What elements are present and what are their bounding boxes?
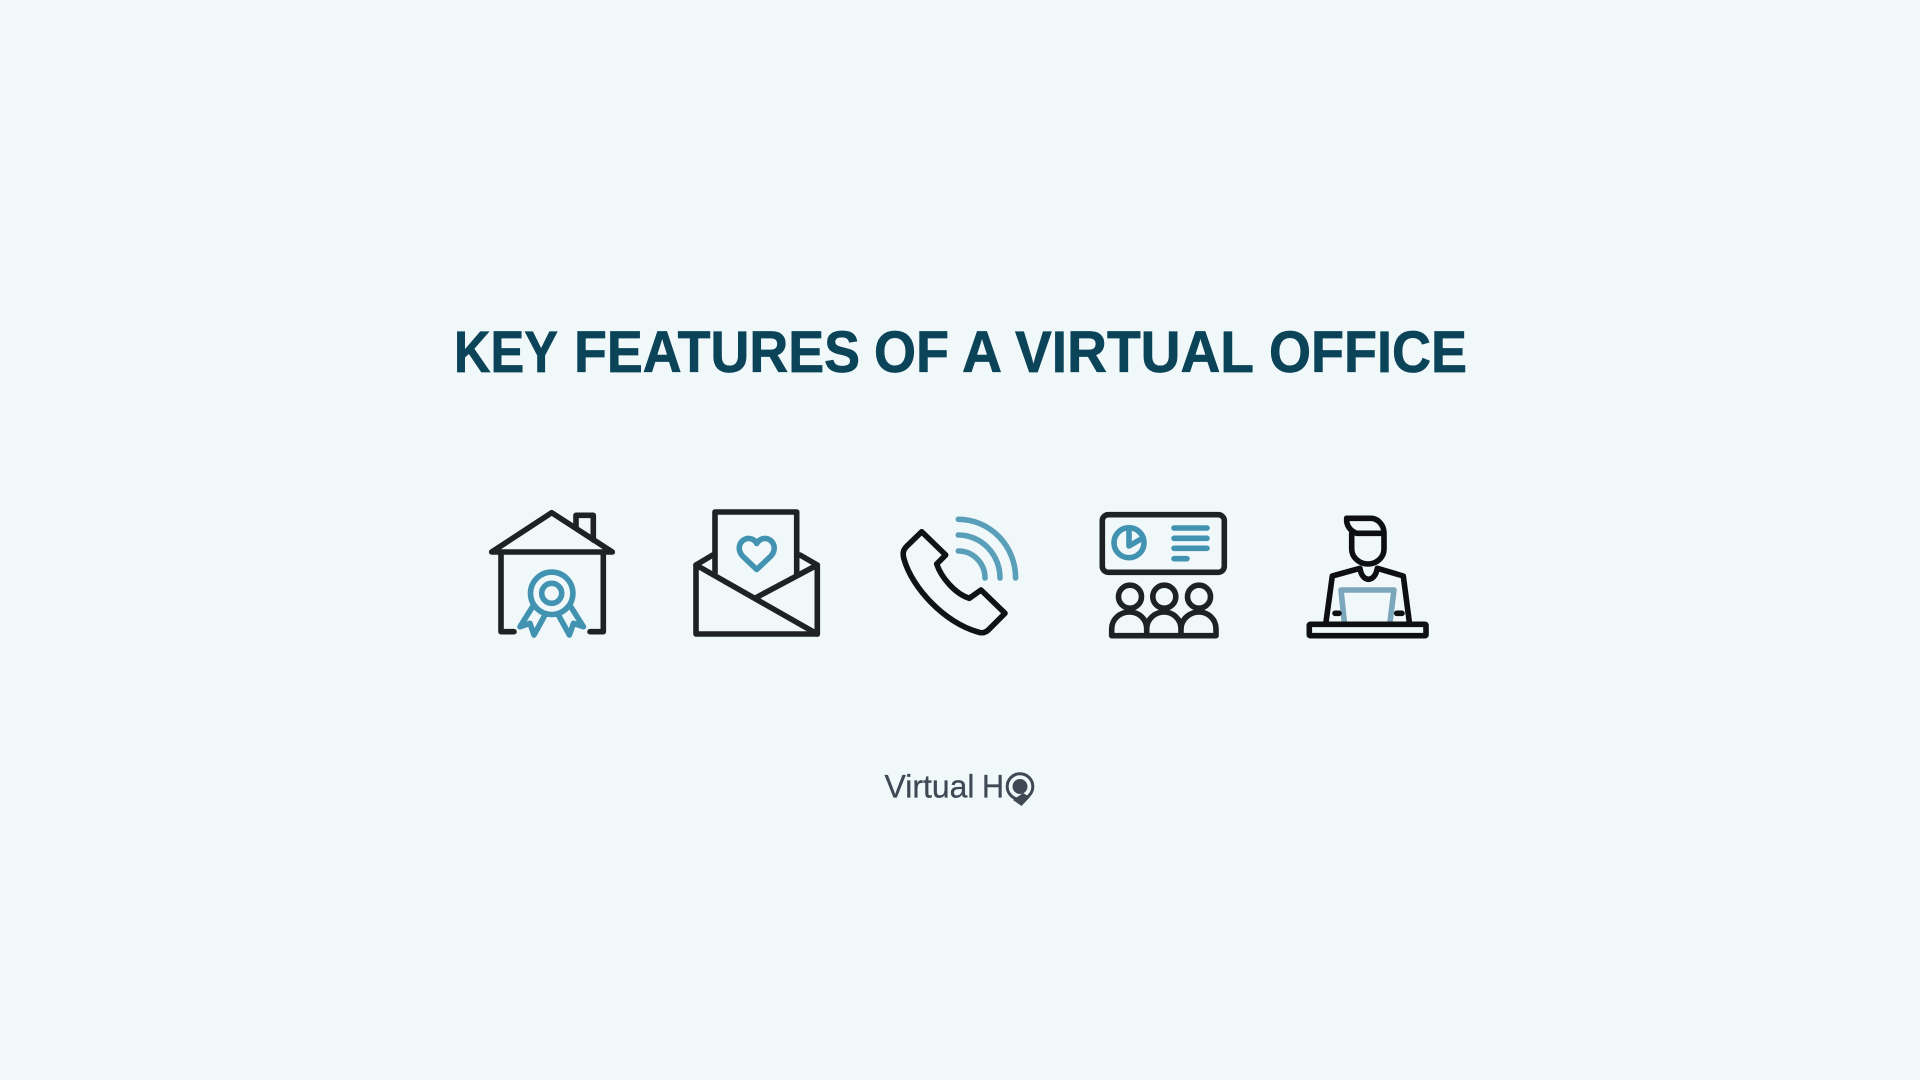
title: FEATURES (574, 320, 860, 385)
award rosette (520, 572, 583, 635)
icon: open envelope with heart letter (696, 512, 817, 634)
icon: house with award rosette (492, 513, 612, 635)
title: VIRTUAL (1015, 320, 1254, 385)
title: A (962, 320, 1002, 385)
head and hair (1347, 518, 1384, 564)
title: OFFICE (1269, 320, 1467, 385)
heart (739, 538, 774, 570)
pie chart (1114, 528, 1144, 558)
laptop (1341, 590, 1394, 622)
logo: Virtual HQ (884, 768, 1033, 806)
icon: person at laptop (1309, 518, 1426, 636)
arms (1335, 610, 1402, 616)
presentation screen (1102, 515, 1224, 572)
torso (1326, 568, 1409, 622)
text lines (1174, 528, 1207, 559)
title: OF (874, 320, 949, 385)
logo pin mark (1007, 774, 1033, 806)
logo letter H: H (982, 768, 1004, 804)
logo wordmark: Virtual (884, 768, 974, 804)
icon: telephone with signal arcs (903, 519, 1016, 633)
signal arcs (958, 519, 1016, 578)
title: KEY (454, 320, 558, 385)
house outline (492, 513, 612, 632)
audience (1112, 585, 1216, 636)
title (454, 320, 1467, 385)
envelope and letter (696, 512, 817, 634)
desk (1309, 624, 1426, 636)
icon: presentation screen with audience (1102, 515, 1224, 636)
telephone handset (903, 532, 1005, 633)
